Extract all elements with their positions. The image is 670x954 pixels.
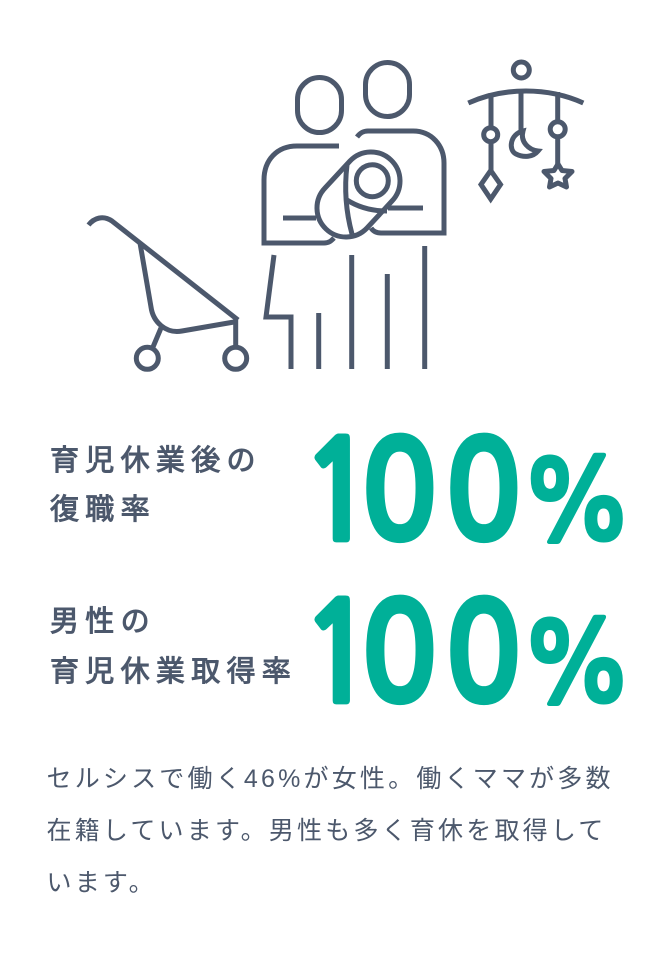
illustration: family with baby, stroller and mobile — [88, 62, 583, 369]
left parent head — [298, 78, 342, 132]
baby head — [356, 165, 388, 197]
stat: return to work after childcare leave — [50, 423, 634, 561]
label: male leave rate: 育児休業取得率 — [50, 655, 297, 688]
stroller handle and frame — [88, 218, 238, 320]
left parent body — [264, 146, 339, 243]
body text: セルシスで働く46%が女性。働くママが多数 — [46, 765, 614, 793]
diamond — [481, 170, 500, 199]
stroller right wheel — [225, 347, 247, 369]
icon: parents holding a baby — [264, 62, 444, 369]
right arm — [388, 206, 423, 210]
number: 100%: % — [520, 610, 634, 721]
stroller rear leg — [233, 320, 238, 347]
left parent leg outer — [266, 255, 291, 369]
stat: male childcare leave — [50, 585, 634, 723]
body text: います。 — [46, 869, 157, 897]
baby swaddle — [317, 152, 400, 237]
right parent leg inner — [385, 274, 390, 369]
label: return rate: 育児休業後の — [50, 444, 262, 477]
star — [544, 164, 572, 187]
mobile arc — [468, 91, 583, 103]
right parent body — [357, 131, 444, 233]
number: 100% — [300, 423, 634, 561]
right string — [555, 92, 560, 165]
body text: 在籍しています。男性も多く育休を取得して — [46, 817, 607, 845]
right parent head — [366, 62, 410, 116]
left string — [488, 93, 494, 171]
centre string — [518, 92, 524, 130]
left bead — [484, 128, 498, 142]
left arm — [283, 216, 316, 220]
moon — [511, 131, 538, 156]
icon: baby mobile — [468, 62, 583, 199]
mobile ring — [513, 62, 529, 78]
right parent leg right — [422, 246, 427, 369]
stroller seat — [140, 243, 237, 331]
label: return rate: 復職率 — [50, 493, 156, 526]
left parent leg inner — [316, 313, 321, 369]
stroller left wheel — [136, 347, 158, 369]
number: 100%: 100 — [300, 423, 522, 561]
label: male leave rate: 男性の — [50, 605, 156, 638]
right bead — [550, 122, 565, 137]
number: 100%: 100 — [300, 585, 522, 723]
right parent leg left — [349, 255, 354, 369]
swaddle fold vertical — [346, 165, 352, 234]
icon: stroller — [88, 218, 247, 369]
number: 100%: % — [520, 448, 634, 559]
swaddle fold horizontal — [347, 200, 387, 211]
number: 100% — [300, 585, 634, 723]
stroller front leg — [153, 328, 161, 347]
